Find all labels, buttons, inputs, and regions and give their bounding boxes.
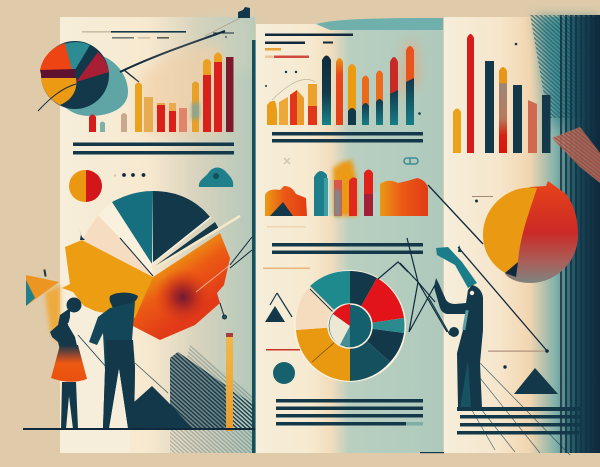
bar chart: middle page large: [322, 46, 421, 125]
slice: navy: [153, 191, 210, 264]
diagonal grid lines: [466, 363, 570, 455]
text line with end dot: [488, 349, 549, 353]
figure: man with raised arm: [429, 245, 483, 408]
icon: small pill: [404, 158, 418, 164]
decorative peach line: [267, 226, 306, 228]
icon: teal blob: [199, 168, 233, 187]
bar chart: middle page small: [265, 71, 317, 125]
text lines: middle bottom: [276, 399, 423, 426]
hot spot: [155, 269, 211, 325]
donut chart: [294, 270, 406, 382]
short line and dot: [472, 196, 493, 202]
slice: red and orange blob: [125, 233, 230, 340]
red line: [266, 349, 300, 350]
figure: woman: [50, 298, 107, 429]
pin: small: [79, 229, 85, 240]
hatched red band: [552, 127, 600, 183]
peach glow behind bars: [140, 44, 222, 132]
pie chart: top left: [40, 41, 109, 109]
hatch line: [135, 363, 168, 393]
text lines: left page: [73, 142, 234, 154]
big circle chart: [483, 181, 578, 283]
platform lines: [457, 407, 582, 434]
triangle: right page: [514, 368, 558, 394]
text lines: middle centre: [272, 243, 423, 254]
heading lines: [82, 31, 186, 39]
slice: cream: [98, 202, 153, 275]
long diagonal pointer: upper: [428, 185, 483, 244]
figure: man: [89, 293, 138, 428]
triangle icon with lines: [265, 293, 292, 322]
pointer lines: [220, 237, 252, 319]
area chart: orange block: [380, 178, 428, 216]
glow: peach behind bars: [396, 42, 420, 100]
arrow: pen stroke: [38, 18, 240, 111]
dot: [503, 365, 507, 369]
slice: orange: [62, 240, 153, 318]
bottom underline: [420, 452, 444, 453]
bar chart: middle page lower: [314, 160, 379, 216]
long diagonal pointer: lower: [458, 247, 548, 352]
pie chart: large: [62, 191, 240, 340]
icon: split circle: [69, 170, 102, 202]
bar chart: left page: [89, 52, 234, 132]
bar chart: right page: [453, 34, 550, 153]
teal blob behind pie: [62, 53, 128, 116]
white divider: [152, 217, 211, 264]
mountain: navy: [133, 386, 194, 430]
ground line: [23, 428, 255, 430]
panel: left page: [60, 17, 256, 453]
pointer: yellow bar: [226, 333, 233, 431]
icon: small triangle: [505, 262, 518, 277]
inner circle: [328, 304, 372, 348]
hatched grey mountain: [170, 352, 254, 430]
zigzag pointer lines: [378, 238, 447, 332]
text lines: middle top: [265, 34, 353, 58]
teal circle: [273, 362, 295, 384]
text lines: middle upper: [272, 132, 423, 142]
panel: middle page: [256, 18, 443, 453]
icon: small cross: [284, 158, 290, 164]
dots: [114, 173, 145, 177]
slice: peach: [82, 215, 153, 277]
vertical page edge: [252, 40, 256, 453]
area chart: mountains: [265, 186, 307, 216]
panel: right page: [444, 15, 600, 453]
mini bars: top corner: [238, 7, 250, 18]
triangle: left flag: [26, 270, 60, 345]
slice: teal: [112, 191, 153, 264]
peach line: [263, 268, 310, 269]
